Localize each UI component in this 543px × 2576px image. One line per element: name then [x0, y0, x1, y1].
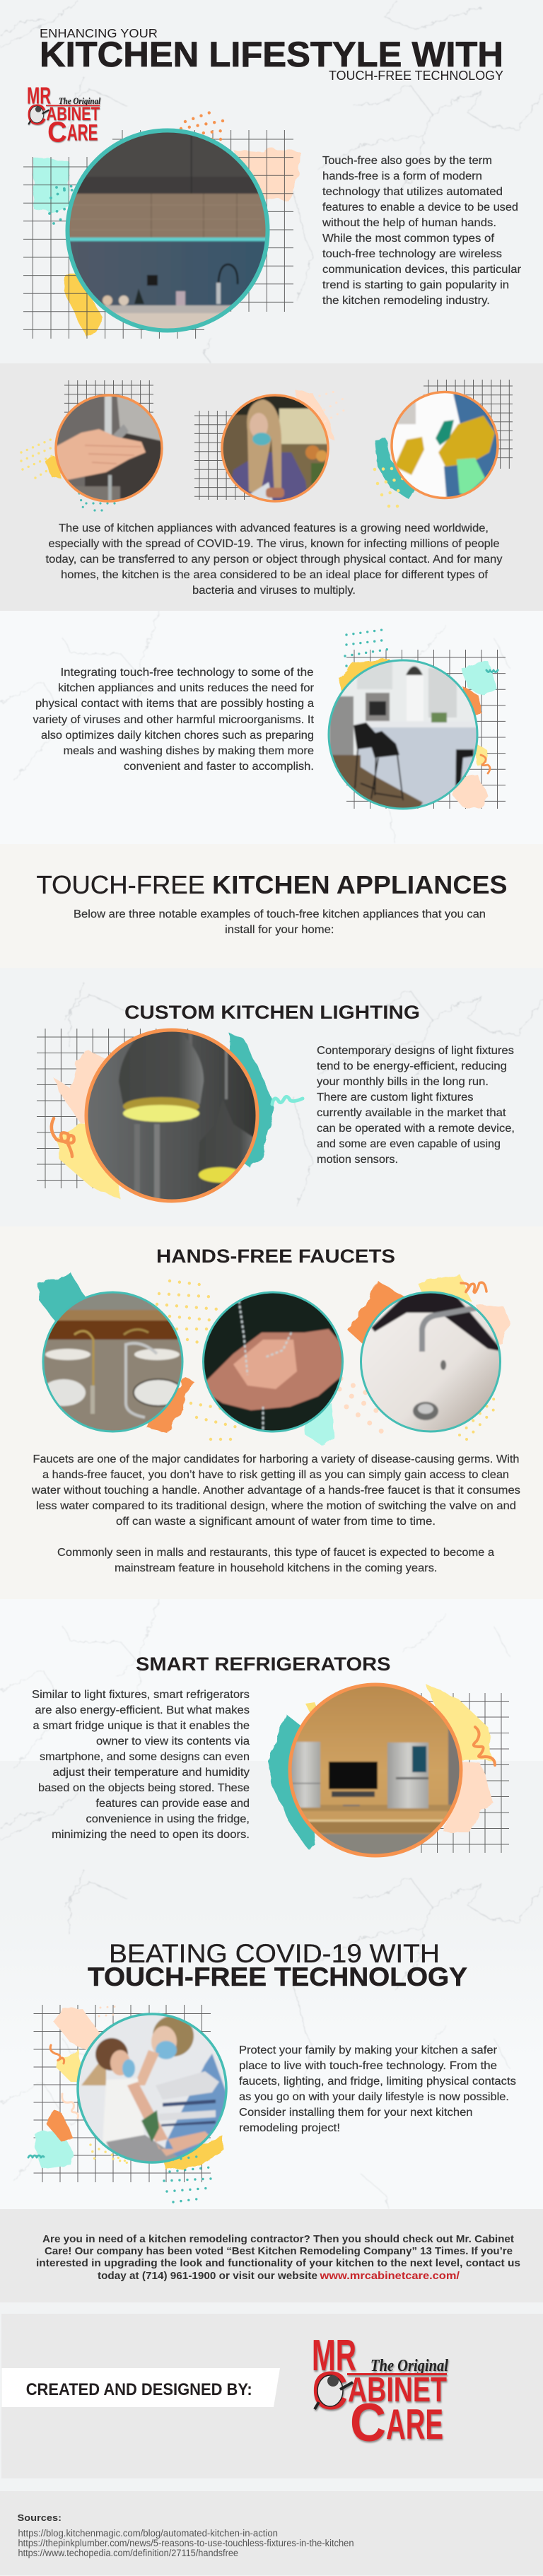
text block: intro	[322, 155, 521, 307]
splash: mint	[461, 661, 498, 696]
text block: custom lighting: can be operated with a remote device,	[317, 1123, 515, 1135]
subheading: Below are three notable examples of touch-free kitchen appliances that you can	[74, 908, 486, 920]
splash: peach	[54, 1050, 110, 1124]
grid	[194, 411, 259, 500]
illustration: white kitchen photo with decorations	[327, 629, 506, 813]
text block: custom lighting	[317, 1045, 515, 1166]
text block: custom lighting: your monthly bills in the long run.	[317, 1076, 489, 1088]
photo: gloved hands cleaning	[393, 393, 496, 497]
splash: teal	[267, 1714, 315, 1849]
text block: integrating touch-free: kitchen appliances and units reduces the need for	[58, 682, 314, 694]
squiggle: teal	[28, 2155, 44, 2158]
text block: faucets: mainstream feature in household kitchens in the coming years.	[115, 1562, 437, 1574]
heading: beating covid-19	[88, 1939, 467, 1991]
dots: peach	[339, 1378, 382, 1432]
ring: orange	[392, 392, 498, 498]
text block: smart refrigerators: minimizing the need to open its doors.	[52, 1829, 250, 1841]
splash: yellow lower	[477, 745, 488, 765]
grid: lower left	[23, 157, 204, 339]
text block: integrating touch-free: also optimizes daily kitchen chores such as preparing	[41, 730, 314, 742]
text block: contact details	[36, 2233, 520, 2282]
photo: mother and child with masks	[78, 2013, 228, 2163]
splash: light yellow	[417, 1274, 471, 1301]
squiggle: orange	[52, 1118, 74, 1157]
grid	[424, 380, 513, 469]
splash: small yellow	[305, 1702, 318, 1715]
photo: double vanity faucets	[42, 1292, 184, 1433]
splash: teal	[38, 1272, 92, 1323]
text block: intro: without the help of human hands.	[322, 217, 496, 229]
text block: protect your family: Consider installing them for your next kitchen	[239, 2107, 472, 2119]
heading: hands-free faucets: HANDS-FREE FAUCETS	[156, 1246, 395, 1267]
text block: integrating touch-free: meals and washing dishes by making them more	[64, 745, 314, 757]
text block: smart refrigerators	[32, 1689, 250, 1841]
ring: teal	[68, 130, 267, 331]
text block: integrating touch-free	[33, 667, 315, 773]
text block: smart refrigerators: features can provide ease and	[96, 1798, 250, 1810]
text block: protect your family: faucets, lighting, and fridge, limiting physical contacts	[239, 2076, 516, 2088]
splash: mint	[304, 1403, 334, 1446]
grid: upper right	[112, 130, 293, 312]
heading: smart refrigerators: SMART REFRIGERATORS	[136, 1653, 390, 1675]
text block: smart refrigerators: smartphone, and some designs can even	[40, 1751, 250, 1763]
ring: orange	[56, 395, 162, 501]
text block: custom lighting: Contemporary designs of light fixtures	[317, 1045, 514, 1057]
text block: faucets: Commonly seen in malls and restaurants, this type of faucet is expected to become a	[57, 1547, 494, 1559]
text block: custom lighting: currently available in the market that	[317, 1107, 506, 1119]
title line: enhancing your: ENHANCING YOUR	[40, 26, 158, 40]
photo: woman in kitchen	[223, 396, 327, 500]
splash: yellow	[338, 659, 390, 693]
photo: hands under faucet	[57, 396, 161, 500]
text block: custom lighting: There are custom light fixtures	[317, 1091, 474, 1103]
ring: orange	[222, 395, 328, 501]
splash: light yellow	[57, 2048, 83, 2082]
panel: grey COVID band	[0, 363, 543, 611]
logo: Mr. Cabinet Care small: MR	[27, 83, 51, 109]
splash: teal	[375, 438, 416, 499]
splash: peach	[233, 148, 300, 201]
ring: teal	[204, 1292, 342, 1432]
text block: intro: communication devices, this particular	[322, 264, 521, 276]
text block: use of kitchen appliances: today, can be transferred to any person or object through physical contact. And for many	[45, 554, 503, 566]
logo: Mr. Cabinet Care large: ARE	[386, 2401, 443, 2448]
banner: CREATED AND DESIGNED BY:	[26, 2380, 252, 2399]
logo: Mr. Cabinet Care small: C	[27, 98, 47, 131]
text block: faucets: less water compared to its traditional design, where the motion of switching the valve on and	[36, 1500, 516, 1512]
text block: intro: features to enable a device to be used	[322, 201, 518, 213]
text block: smart refrigerators: adjust their temperature and humidity	[52, 1767, 250, 1779]
subheading: install for your home:	[225, 924, 334, 936]
squiggle: peach	[62, 2094, 78, 2118]
text block: faucets: off can waste a significant amount of water from time to time.	[116, 1516, 436, 1528]
splash: yellow	[45, 457, 62, 478]
squiggle: orange	[461, 1282, 486, 1292]
text block: faucets: water without touching a handle. Another advantage of a hands-free faucet is that it consumes	[31, 1485, 520, 1497]
source links: https://www.techopedia.com/definition/27115/handsfree	[18, 2548, 238, 2558]
text block: intro: Touch-free also goes by the term	[322, 155, 492, 167]
text block: protect your family: place to live with touch-free technology. From the	[239, 2060, 497, 2072]
grid	[64, 380, 153, 426]
grid	[37, 1029, 189, 1188]
splash: mint	[34, 2129, 74, 2169]
logo: Mr. Cabinet Care large: C	[350, 2393, 386, 2453]
splash: orange right	[348, 1281, 409, 1343]
illustration: family with masks photo with decorations	[28, 2005, 228, 2202]
illustration: cleaning gloves photo	[375, 380, 513, 506]
logo: Mr. Cabinet Care small: ABINET	[47, 103, 100, 124]
photo: water over cupped hands	[202, 1292, 344, 1433]
squiggle: mint	[272, 1096, 303, 1104]
text block: protect your family: as you go on with your daily lifestyle is now possible.	[239, 2091, 509, 2103]
splash: light yellow	[57, 1124, 120, 1199]
text block: intro: touch-free technology are wireless	[322, 248, 502, 260]
text block: protect your family: Protect your family by making your kitchen a safer	[239, 2044, 497, 2056]
text block: faucets	[31, 1453, 520, 1574]
splash: peach	[452, 774, 489, 807]
squiggle: orange	[50, 2045, 64, 2063]
splash: yellow	[64, 274, 103, 336]
text block: smart refrigerators: are also energy-efficient. But what makes	[35, 1704, 250, 1716]
title	[40, 26, 503, 83]
splash: orange	[147, 1377, 192, 1432]
dots: teal	[79, 493, 116, 510]
logo: Mr. Cabinet Care small: The Original	[59, 95, 101, 106]
title line: touch-free technology: TOUCH-FREE TECHNOLOGY	[329, 69, 503, 83]
illustration: hero kitchen photo with decorations	[23, 112, 300, 339]
text block: intro: the kitchen remodeling industry.	[322, 295, 490, 307]
panel: touch-free kitchen appliances	[0, 844, 543, 968]
photo: kitchen wall cabinets	[69, 133, 266, 328]
splash: orange	[463, 687, 482, 715]
illustration: pendant lamps photo with decorations	[37, 1029, 303, 1205]
splash: teal	[230, 1034, 276, 1166]
dots: yellow	[375, 468, 407, 506]
title line: kitchen lifestyle with: KITCHEN LIFESTYLE WITH	[40, 35, 503, 74]
text block: integrating touch-free: variety of viruses and other harmful microorganisms. It	[33, 714, 315, 726]
grid	[34, 2005, 211, 2182]
splash: peach	[475, 1304, 509, 1343]
heading: beating covid-19: BEATING COVID-19 WITH	[109, 1939, 440, 1968]
logo: Mr. Cabinet Care small	[27, 83, 101, 148]
source links: https://thepinkplumber.com/news/5-reasons-to-use-touchless-fixtures-in-the-kitchen	[18, 2538, 354, 2548]
panel: created and designed by	[1, 2314, 543, 2478]
logo: Mr. Cabinet Care large: C	[312, 2361, 348, 2421]
text block: smart refrigerators: a smart fridge unique is that it enables the	[33, 1720, 250, 1732]
panel: hands-free faucets	[31, 1249, 520, 1574]
text block: contact details: interested in upgrading the look and functionality of your kitchen to the next level, contact us	[36, 2257, 520, 2269]
logo: Mr. Cabinet Care small: ARE	[67, 120, 98, 146]
ring: teal	[78, 2014, 226, 2162]
squiggle: teal	[486, 670, 498, 672]
splash: peach	[444, 1762, 494, 1832]
banner	[1, 2368, 280, 2407]
heading: custom kitchen lighting: CUSTOM KITCHEN LIGHTING	[124, 1002, 420, 1023]
illustration: hand washing photo	[21, 380, 166, 510]
text block: smart refrigerators: convenience in using the fridge,	[86, 1813, 250, 1825]
ring: orange	[86, 1030, 257, 1201]
splash: peach	[54, 2008, 105, 2054]
text block: intro: hands-free is a form of modern	[322, 170, 482, 182]
panel: contact call to action	[0, 2209, 543, 2302]
illustration: woman with mask photo	[194, 390, 349, 505]
heading: KITCHEN APPLIANCES	[212, 870, 508, 899]
text block: contact details: Are you in need of a kitchen remodeling contractor? Then you should check out Mr. Cabinet	[42, 2233, 514, 2245]
ring: teal	[329, 660, 477, 809]
photo: white kitchen	[329, 662, 477, 807]
splash: peach	[296, 390, 334, 440]
logo: Mr. Cabinet Care small: C	[47, 115, 67, 148]
text block: use of kitchen appliances: homes, the kitchen is the area considered to be an ideal place for different types of	[61, 569, 489, 581]
squiggle: orange	[474, 1727, 495, 1765]
text block: smart refrigerators: owner to view its contents via	[96, 1735, 250, 1747]
dots: teal	[164, 2156, 211, 2202]
text block: smart refrigerators: based on the objects being stored. These	[38, 1782, 250, 1794]
dots: yellow right	[460, 1394, 498, 1439]
photo: modern white sink	[360, 1292, 503, 1433]
grid	[421, 1693, 509, 1853]
text block: protect your family	[239, 2044, 516, 2134]
heading: beating covid-19: TOUCH-FREE TECHNOLOGY	[88, 1962, 467, 1991]
text block: intro: trend is starting to gain popularity in	[322, 279, 509, 291]
splash: orange	[47, 2109, 74, 2141]
text block: faucets: a hands-free faucet, you don’t have to risk getting ill as you can simply gain access to clean	[42, 1469, 509, 1481]
logo: Mr. Cabinet Care large	[312, 2331, 448, 2453]
ring: teal	[43, 1292, 182, 1432]
ring: teal	[361, 1292, 501, 1432]
ring: orange	[290, 1685, 461, 1856]
subheading	[74, 908, 486, 936]
logo: Mr. Cabinet Care large: ABINET	[348, 2371, 447, 2409]
dots: teal	[345, 629, 390, 672]
splash: light yellow	[426, 1684, 491, 1760]
text block: custom lighting: and some are even capable of using	[317, 1138, 501, 1150]
dots: peach	[99, 2006, 120, 2016]
text block: contact details: Care! Our company has been voted “Best Kitchen Remodeling Company” 13 Times. If you’re	[45, 2245, 513, 2257]
heading	[37, 870, 508, 899]
grid	[346, 650, 506, 809]
text block: contact details: today at (714) 961-1900 or visit our website	[98, 2270, 317, 2282]
text block: integrating touch-free: Integrating touch-free technology to some of the	[61, 667, 314, 679]
text block: use of kitchen appliances: especially with the spread of COVID-19. The virus, known for infecting millions of people	[48, 538, 500, 550]
text block: custom lighting: tend to be energy-efficient, reducing	[317, 1060, 507, 1072]
splash: yellow	[163, 2135, 223, 2170]
splash: mint	[33, 157, 69, 212]
text block: protect your family: remodeling project!	[239, 2122, 340, 2134]
text block: use of kitchen appliances	[45, 522, 503, 597]
text block: intro: While the most common types of	[322, 233, 495, 245]
dots: yellow	[21, 438, 54, 478]
dots: yellow	[157, 1281, 240, 1439]
dots: orange	[181, 112, 228, 139]
text block: faucets: Faucets are one of the major candidates for harboring a variety of disease-causing germs. With	[33, 1453, 519, 1465]
text block: integrating touch-free: physical contact with items that are possibly hosting a	[35, 698, 314, 710]
source links: https://blog.kitchenmagic.com/blog/automated-kitchen-in-action	[18, 2528, 278, 2539]
illustration: refrigerators photo with decorations	[267, 1682, 509, 1859]
heading: sources: Sources:	[17, 2512, 62, 2523]
photo: pendant lamps	[85, 1029, 260, 1205]
text block: integrating touch-free: convenient and faster to accomplish.	[124, 761, 314, 773]
heading: TOUCH-FREE	[37, 870, 205, 899]
text block: smart refrigerators: Similar to light fixtures, smart refrigerators	[32, 1689, 250, 1701]
dots: peach	[318, 390, 349, 421]
logo: Mr. Cabinet Care large: MR	[312, 2331, 356, 2380]
text block: contact details: www.mrcabinetcare.com/	[319, 2270, 460, 2282]
text block: use of kitchen appliances: The use of kitchen appliances with advanced features is a growing need worldwide,	[59, 522, 489, 534]
logo: Mr. Cabinet Care large: The Original	[370, 2357, 448, 2375]
dots: yellow	[90, 2145, 129, 2163]
dots: teal	[49, 182, 78, 223]
text block: intro: technology that utilizes automated	[322, 186, 503, 198]
text block: custom lighting: motion sensors.	[317, 1154, 398, 1166]
squiggle: orange	[481, 755, 490, 773]
source links	[18, 2528, 354, 2558]
panel: sources	[0, 2491, 543, 2575]
text block: use of kitchen appliances: bacteria and viruses to multiply.	[192, 585, 356, 597]
photo: fridges and tv on wood wall	[291, 1687, 460, 1854]
